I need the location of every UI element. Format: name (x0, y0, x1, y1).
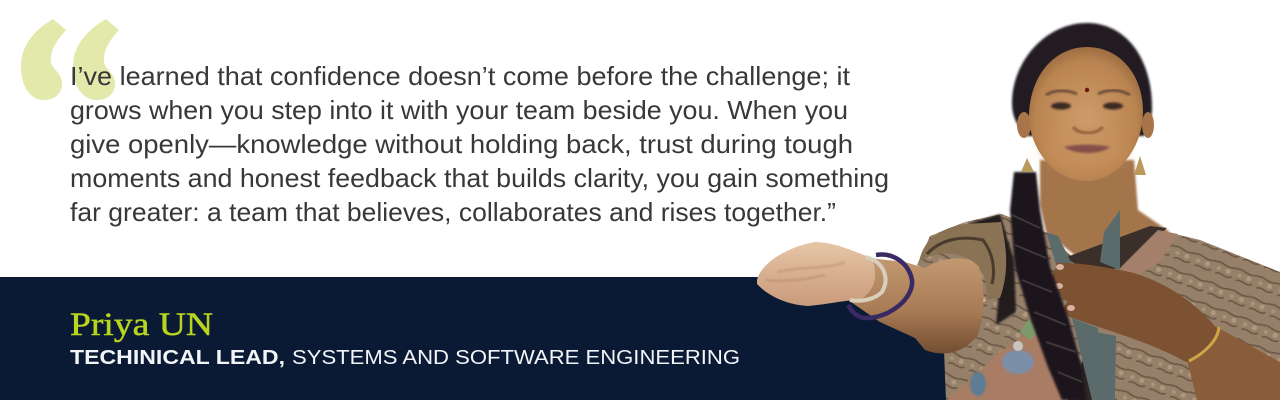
neck (1040, 160, 1170, 266)
sleeve metallic highlight (927, 238, 994, 284)
ears (1017, 112, 1154, 138)
dark neck pleat (1068, 352, 1096, 400)
portrait: woman offering open hand (757, 23, 1280, 400)
open palm (757, 242, 875, 306)
saree body (917, 214, 1280, 400)
quote text: grows when you step into it with your team beside you. When you (70, 95, 848, 125)
quote text: I’ve learned that confidence doesn’t come before the challenge; it (70, 61, 851, 91)
cream bangle (850, 257, 885, 301)
earrings (1021, 156, 1146, 175)
sleeve edge (919, 222, 1006, 300)
saree border dark (1064, 226, 1167, 272)
banner: navy name band (0, 277, 960, 400)
palm crease (765, 262, 845, 281)
job title: SYSTEMS AND SOFTWARE ENGINEERING (292, 347, 740, 369)
eyebrows (1046, 90, 1130, 95)
quote text: give openly—knowledge without holding back, trust during tough (70, 129, 853, 159)
back hair (1012, 23, 1152, 136)
eyes (1051, 102, 1123, 110)
hand on chest (1052, 263, 1218, 362)
icon: opening quotation mark (21, 19, 119, 100)
bindi (1085, 88, 1089, 92)
outstretched arm (848, 256, 984, 354)
forearm to chest (1187, 318, 1280, 400)
gold bracelet (1189, 327, 1219, 361)
quote text (70, 61, 889, 227)
lanyard (1046, 210, 1120, 400)
painted pallu (947, 320, 1066, 400)
job title: TECHINICAL LEAD, (70, 347, 285, 369)
dark blouse shadow (968, 214, 1016, 325)
nose (1073, 127, 1103, 133)
face (1029, 47, 1143, 181)
pink pallu upper (1122, 230, 1178, 280)
finger nails (1055, 264, 1075, 311)
quote text: moments and honest feedback that builds clarity, you gain something (70, 163, 889, 193)
job title (70, 347, 740, 369)
braid strands (1012, 215, 1082, 382)
heading: name: Priya UN (70, 307, 213, 343)
quote text: far greater: a team that believes, collaborates and rises together.” (70, 197, 836, 227)
cheek shade (1043, 128, 1127, 172)
purple bangle (848, 255, 912, 318)
braid (1010, 172, 1086, 400)
lips (1064, 145, 1110, 153)
